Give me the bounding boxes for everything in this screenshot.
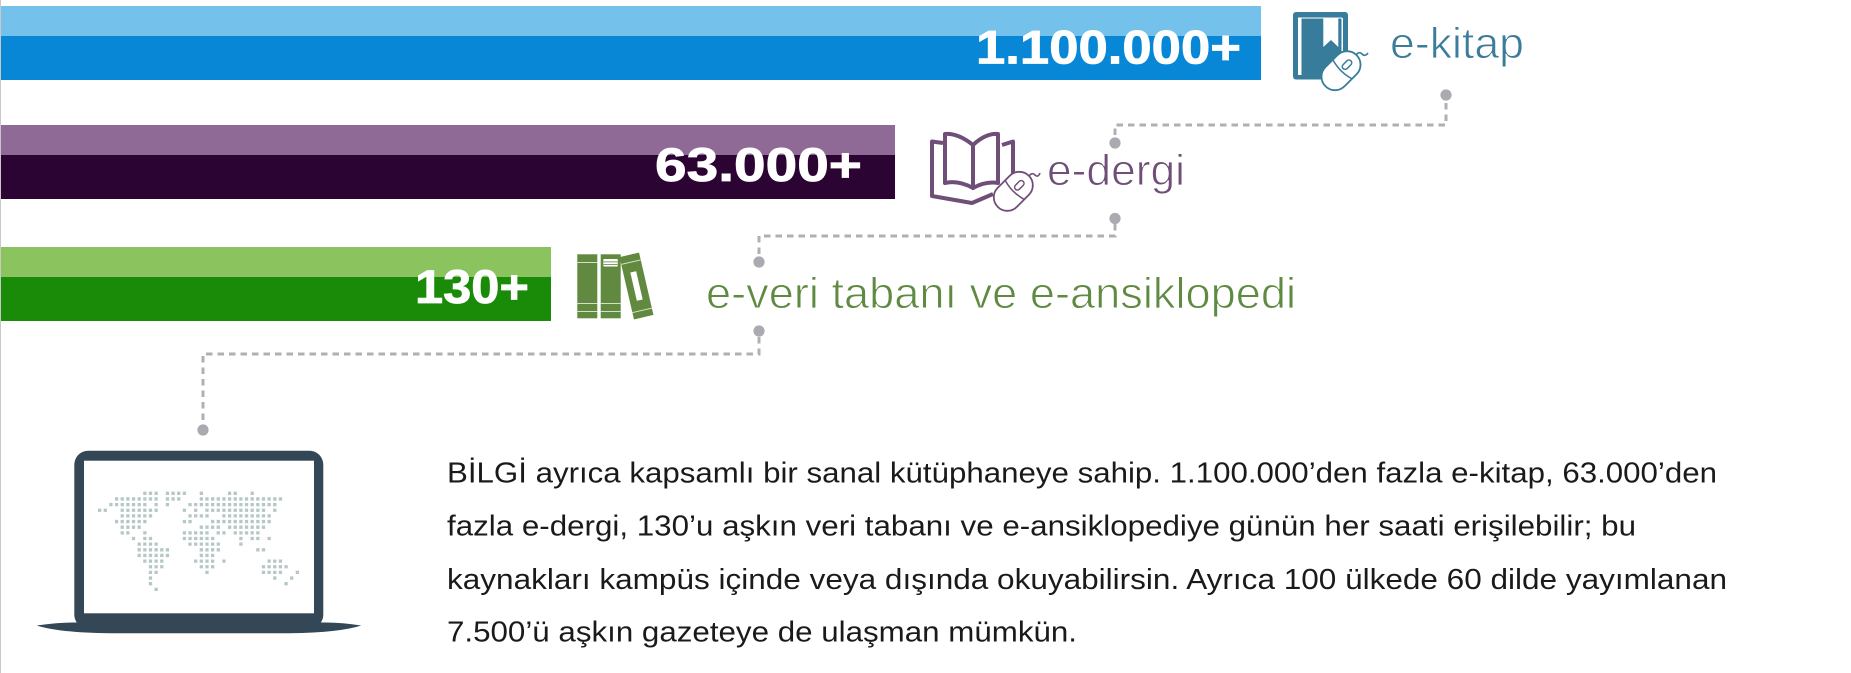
world map dots	[98, 493, 301, 589]
text block: description: 7.500’ü aşkın gazeteye de ulaşman mümkün.	[447, 616, 1077, 648]
panel: e-veri tabanı bar	[1, 247, 551, 321]
value: 130+: 130+	[415, 260, 529, 313]
icon: open book with mouse	[932, 134, 1040, 216]
panel: e-kitap bar	[1, 6, 1261, 80]
icon: laptop with world map	[37, 451, 361, 633]
value: 63.000+: 63.000+	[655, 138, 862, 191]
text block: description: BİLGİ ayrıca kapsamlı bir sanal kütüphaneye sahip. 1.100.000’den fazla e-kitap, 63.000’den	[447, 456, 1717, 490]
text block: description: fazla e-dergi, 130’u aşkın veri tabanı ve e-ansiklopediye günün her saati erişilebilir; bu	[447, 510, 1636, 542]
connector: e-veri tabanı to laptop	[197, 325, 765, 436]
label: e-kitap: e-kitap	[1390, 19, 1524, 68]
icon: books	[577, 253, 653, 319]
text block: description	[447, 456, 1727, 648]
value: 1.100.000+: 1.100.000+	[976, 20, 1241, 74]
connector: e-dergi to e-veri tabanı	[753, 213, 1121, 268]
connector: e-kitap to e-dergi	[1109, 89, 1452, 149]
panel: e-dergi bar	[1, 125, 895, 199]
icon: book with mouse	[1293, 12, 1368, 96]
label: e-veri tabanı ve e-ansiklopedi: e-veri tabanı ve e-ansiklopedi	[706, 269, 1296, 318]
text block: description: kaynakları kampüs içinde veya dışında okuyabilirsin. Ayrıca 100 ülkede 60 dilde yayımlanan	[447, 564, 1727, 596]
label: e-dergi: e-dergi	[1047, 146, 1185, 195]
